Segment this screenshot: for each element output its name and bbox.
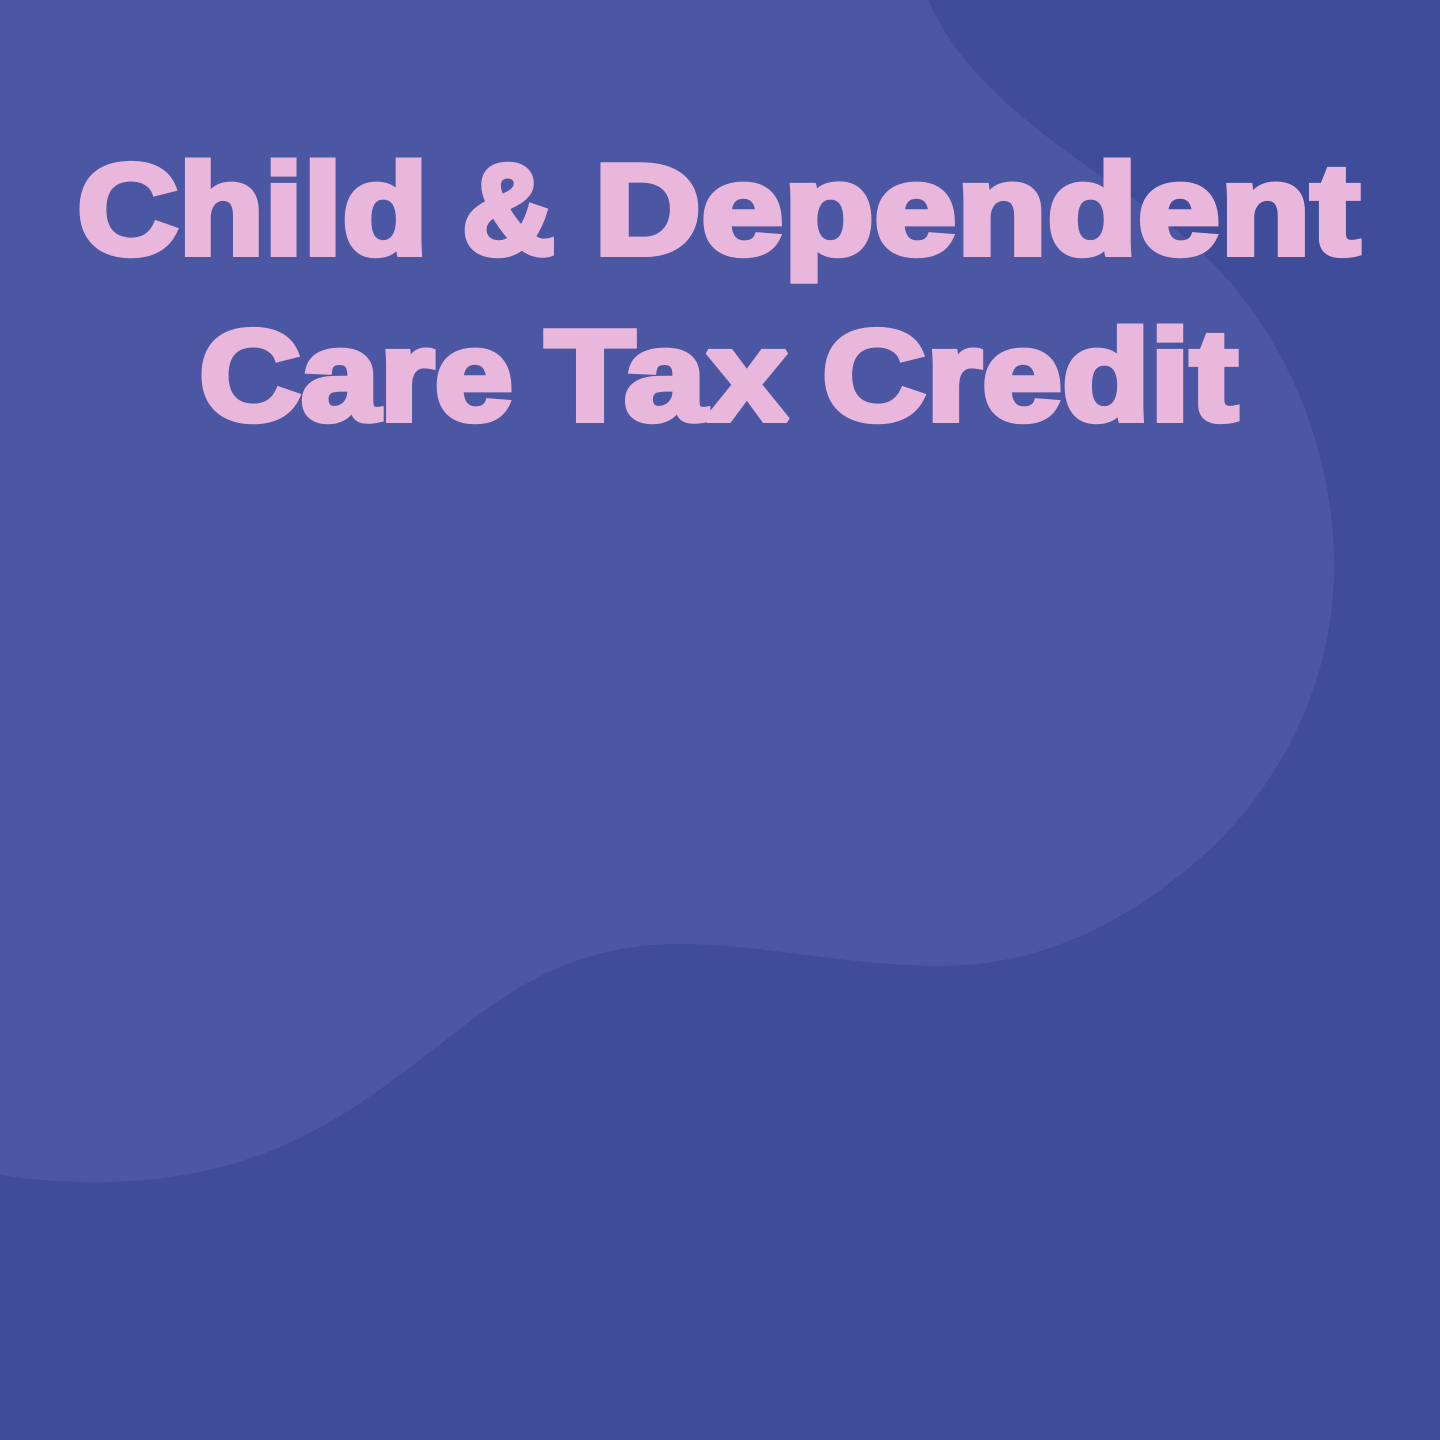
- title line 1: [77, 138, 1360, 282]
- title: [77, 138, 1360, 448]
- background blob: [0, 0, 1334, 1182]
- title line 1: Dependent: [594, 138, 1360, 282]
- title line 1: Child: [77, 138, 428, 282]
- title line 2: Credit: [822, 304, 1238, 448]
- title line 2: Tax: [545, 304, 788, 448]
- title line 2: Care: [199, 304, 513, 448]
- title line 2: [199, 304, 1238, 448]
- title line 1: &: [462, 138, 555, 282]
